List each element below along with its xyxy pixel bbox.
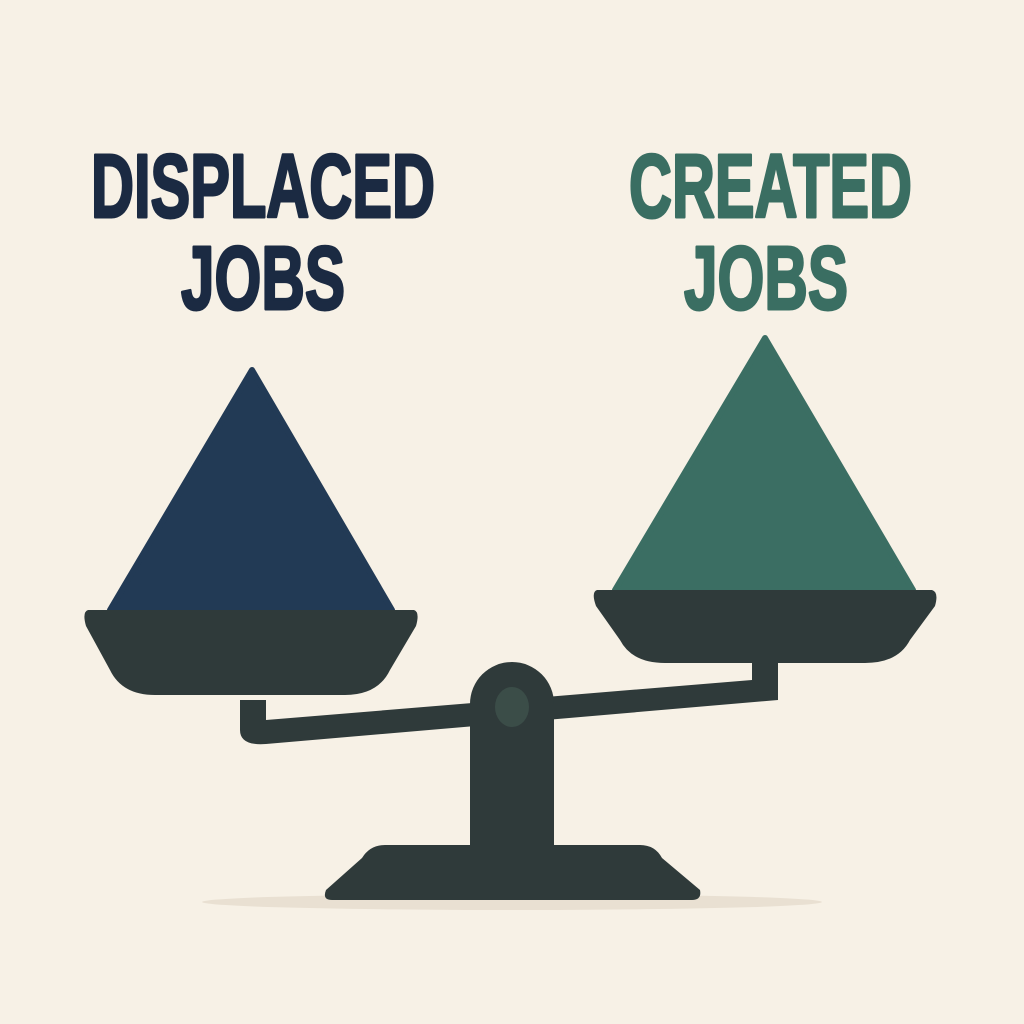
shadow — [202, 894, 822, 910]
left pan with triangle — [84, 370, 418, 695]
pivot — [495, 687, 529, 727]
scale — [84, 338, 936, 900]
right pan with triangle — [594, 338, 936, 663]
beam — [240, 660, 778, 744]
heading: displaced jobs: DISPLACED — [91, 137, 435, 237]
pillar — [470, 662, 554, 845]
heading: created jobs: JOBS — [684, 229, 848, 329]
base — [325, 845, 700, 900]
heading: displaced jobs — [91, 137, 435, 329]
heading: displaced jobs: JOBS — [181, 229, 345, 329]
heading: created jobs — [629, 137, 912, 329]
